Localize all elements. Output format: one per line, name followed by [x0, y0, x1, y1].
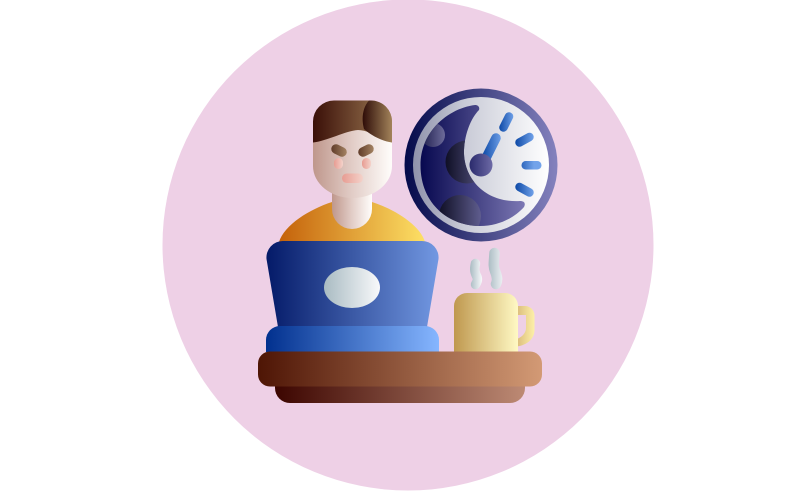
illustration: person working late at a laptop — [162, 0, 654, 490]
laptop logo — [324, 267, 380, 308]
cheeks — [334, 158, 343, 169]
steam right — [494, 253, 497, 284]
mouth — [342, 174, 363, 183]
hair — [313, 100, 392, 142]
background circle — [162, 0, 654, 490]
hair fringe — [363, 100, 392, 142]
desk top — [258, 352, 542, 386]
clock dial and ring — [413, 97, 549, 233]
steam left — [475, 264, 477, 284]
laptop lid — [266, 241, 439, 327]
neck — [332, 185, 372, 229]
clock hub — [470, 154, 492, 176]
desk — [258, 352, 542, 403]
coffee mug — [454, 253, 534, 352]
moon craters — [424, 124, 481, 226]
clock hand — [485, 138, 496, 160]
person — [279, 100, 425, 242]
clock — [404, 88, 558, 242]
laptop base — [266, 326, 439, 352]
mug body — [454, 293, 518, 352]
clock outer rim — [404, 88, 558, 242]
shirt — [279, 202, 425, 242]
clock ticks — [504, 116, 542, 192]
eyebrows — [336, 149, 369, 152]
laptop — [266, 241, 439, 352]
desk lower — [275, 380, 525, 403]
face — [313, 125, 392, 198]
crescent moon — [420, 105, 525, 226]
mug handle — [517, 306, 534, 346]
